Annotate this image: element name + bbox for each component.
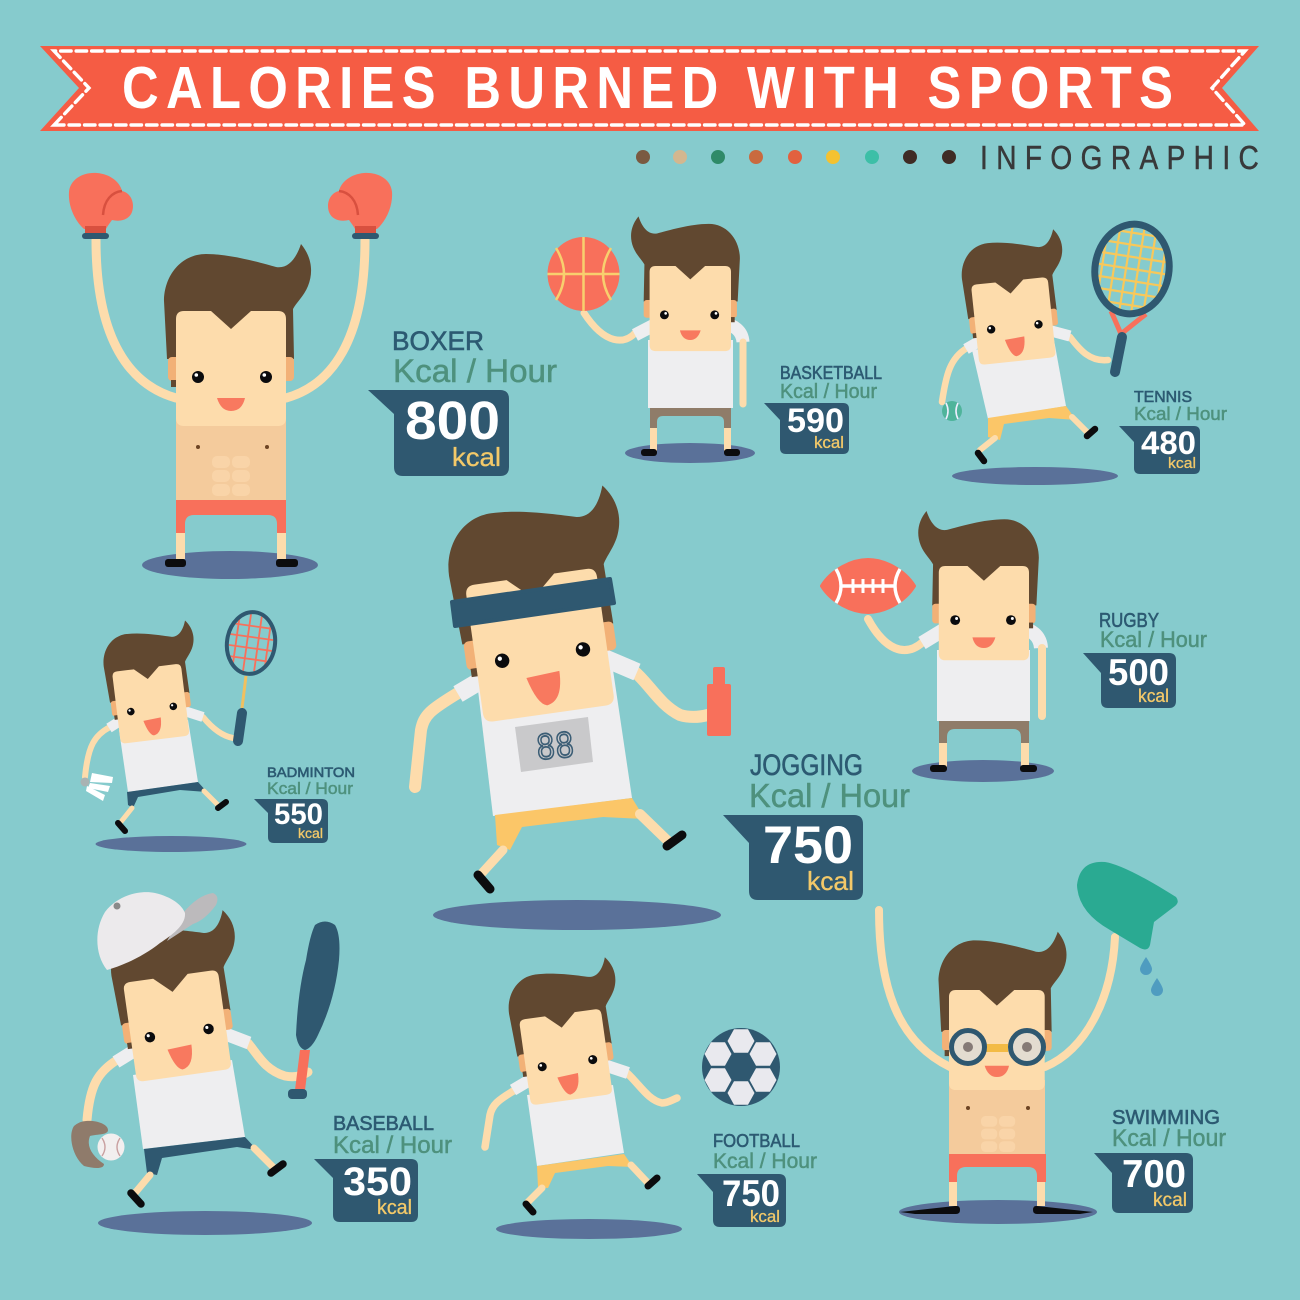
label: basketball: BASKETBALL <box>780 363 882 383</box>
icon: water drops <box>1140 957 1163 996</box>
figure: swimmer <box>879 862 1178 1224</box>
label: basketball: 590 <box>787 402 844 440</box>
icon: soccer ball <box>702 1028 780 1106</box>
icon: rugby ball <box>822 560 914 612</box>
baseball cap <box>97 892 217 970</box>
label: rugby <box>1083 610 1207 708</box>
figure: badminton player <box>80 608 279 852</box>
label: rugby: kcal <box>1138 686 1169 706</box>
label: football: Kcal / Hour <box>713 1150 817 1173</box>
label: tennis <box>1119 389 1227 474</box>
label: football: 750 <box>722 1173 780 1214</box>
label: baseball: Kcal / Hour <box>333 1132 452 1159</box>
header colour dots <box>636 150 956 164</box>
icon: right boxing glove <box>328 173 392 239</box>
label: football: kcal <box>750 1207 780 1226</box>
label: jogging: Kcal / Hour <box>749 777 910 814</box>
race bib <box>515 717 593 772</box>
race bib: 88 <box>535 725 576 772</box>
icon: baseball glove <box>71 1121 108 1168</box>
label: swimming <box>1094 1107 1226 1213</box>
label: swimming: SWIMMING <box>1112 1107 1220 1129</box>
label: jogging: kcal <box>807 866 854 896</box>
label: badminton: Kcal / Hour <box>267 779 353 798</box>
icon: shuttlecock <box>80 773 113 801</box>
figure: baseball player <box>71 892 340 1235</box>
icon: baseball bat <box>288 922 340 1099</box>
label: baseball: kcal <box>377 1197 412 1219</box>
icon: swim cap <box>1077 862 1178 949</box>
label: basketball: Kcal / Hour <box>780 381 877 403</box>
label: boxer: Kcal / Hour <box>393 353 557 389</box>
label: rugby: 500 <box>1108 652 1169 693</box>
label: baseball: 350 <box>343 1160 412 1204</box>
label: rugby: RUGBY <box>1099 610 1159 632</box>
label: basketball: kcal <box>814 433 844 452</box>
label: boxer: 800 <box>405 391 500 451</box>
label: baseball: BASEBALL <box>333 1113 434 1135</box>
label: basketball <box>764 363 882 454</box>
label: swimming: Kcal / Hour <box>1112 1125 1226 1152</box>
label: boxer <box>368 326 557 476</box>
label: badminton <box>254 764 355 843</box>
figure: jogger <box>415 484 731 930</box>
title text: CALORIES BURNED WITH SPORTS <box>122 54 1173 121</box>
icon: basketball <box>548 237 620 311</box>
icon: baseball <box>98 1134 124 1160</box>
label: badminton: BADMINTON <box>267 764 355 780</box>
label: tennis: kcal <box>1168 455 1196 472</box>
label: rugby: Kcal / Hour <box>1100 627 1207 652</box>
figure: rugby player <box>822 511 1054 782</box>
icon: water bottle <box>707 667 731 736</box>
label: baseball <box>314 1113 452 1222</box>
icon: left boxing glove <box>69 173 133 239</box>
icon: badminton racket <box>223 608 279 741</box>
icon: tennis ball <box>942 401 962 421</box>
label: jogging: JOGGING <box>750 749 863 782</box>
headband <box>452 579 614 626</box>
label: football <box>697 1131 817 1227</box>
label: jogging <box>723 749 910 900</box>
label: boxer: BOXER <box>392 326 484 356</box>
label: boxer: kcal <box>452 442 501 472</box>
label: tennis: TENNIS <box>1134 389 1192 406</box>
figure: basketball player <box>548 216 755 463</box>
label: jogging: 750 <box>763 816 853 875</box>
label: tennis: Kcal / Hour <box>1134 404 1227 424</box>
label: swimming: 700 <box>1122 1153 1186 1196</box>
label: football: FOOTBALL <box>713 1131 800 1151</box>
label: tennis: 480 <box>1141 425 1196 461</box>
label: badminton: 550 <box>274 798 323 831</box>
title ribbon <box>40 46 1259 131</box>
figure: tennis player <box>942 213 1179 485</box>
figure: boxer <box>69 173 392 579</box>
infographic subtitle: INFOGRAPHIC <box>980 140 1259 177</box>
label: swimming: kcal <box>1153 1190 1187 1211</box>
label: badminton: kcal <box>298 825 323 841</box>
figure: football player <box>485 956 780 1239</box>
swimming goggles <box>952 1030 1044 1064</box>
icon: tennis racket <box>1091 220 1173 377</box>
